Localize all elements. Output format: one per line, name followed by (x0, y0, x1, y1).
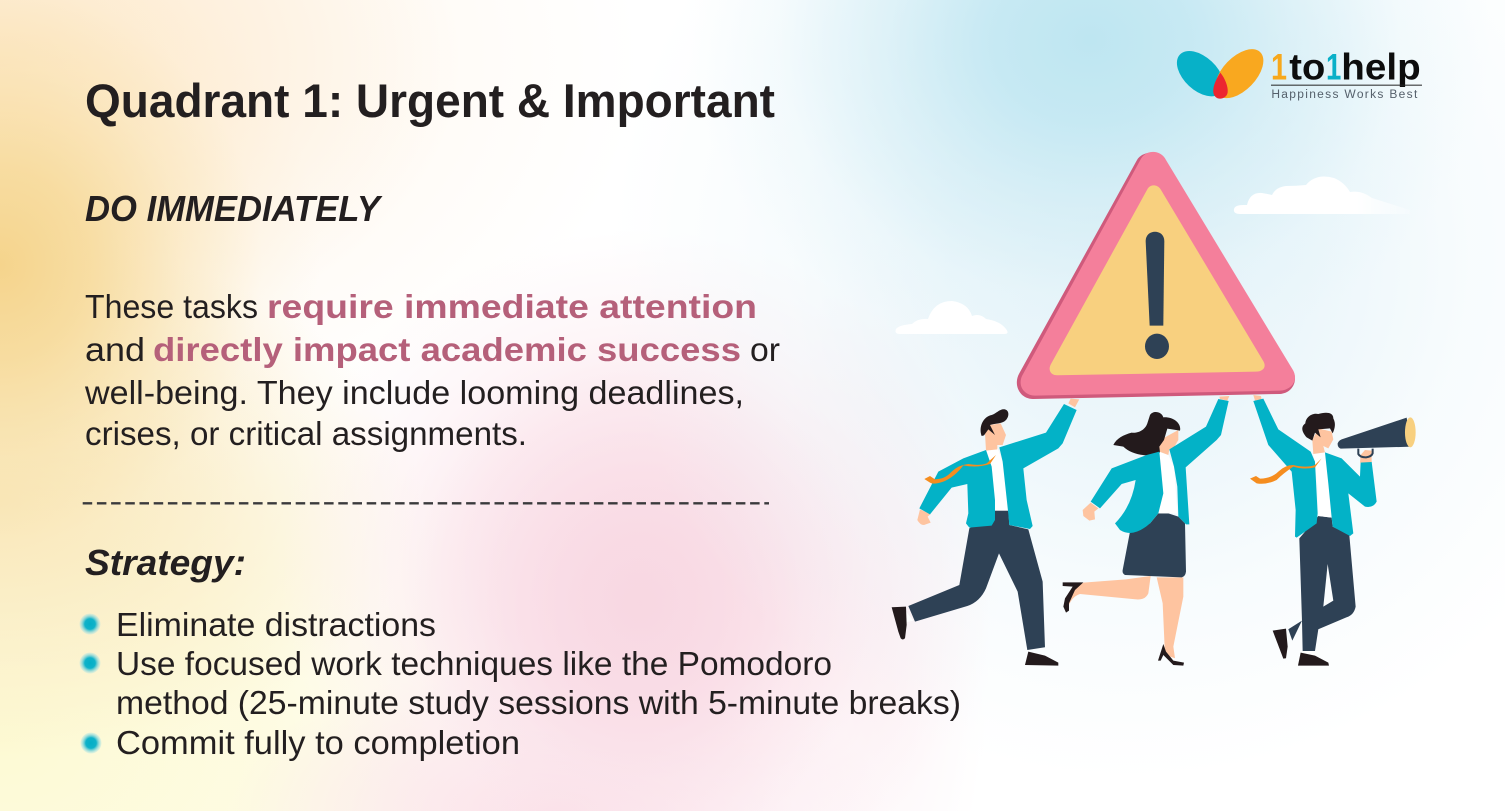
logo: 1to1help: help (1341, 45, 1421, 87)
bullet: focused work techniques (80, 645, 961, 721)
body paragraph: directly impact academic success (153, 331, 741, 368)
body paragraph: require immediate attention (267, 288, 757, 325)
cloud: left (896, 301, 1008, 334)
body paragraph: well-being. They include looming deadlines, (84, 374, 744, 411)
body paragraph: and (85, 331, 145, 368)
logo: 1to1help: Happiness Works Best (1271, 87, 1418, 101)
figure: center woman (1063, 396, 1229, 666)
body paragraph: or (750, 331, 780, 368)
warning triangle sign (1017, 152, 1295, 399)
logo: 1to1help (1168, 41, 1422, 107)
bullet: focused work techniques: Use focused work techniques like the Pomodoro (116, 645, 832, 682)
logo: 1to1help: 1 (1326, 45, 1341, 87)
logo: 1to1help: 1 (1271, 45, 1287, 87)
figure: right man with megaphone (1250, 395, 1416, 666)
title: Quadrant 1: Urgent & Important (85, 74, 775, 127)
bullet: eliminate distractions: Eliminate distractions (116, 606, 436, 643)
bullet: focused work techniques: method (25-minute study sessions with 5-minute breaks) (116, 684, 961, 721)
bullet: commit fully: Commit fully to completion (116, 724, 520, 761)
subheading: strategy: Strategy: (85, 542, 246, 583)
body paragraph: crises, or critical assignments. (85, 415, 527, 452)
body paragraph (84, 288, 780, 452)
body paragraph: These tasks (85, 288, 258, 325)
logo: 1to1help: to (1289, 45, 1325, 87)
illustration: three people holding warning sign (892, 152, 1416, 666)
strategy list (80, 606, 961, 761)
figure: left man (892, 399, 1079, 666)
subheading: do immediately: DO IMMEDIATELY (85, 188, 383, 229)
cloud: right (1234, 177, 1410, 214)
